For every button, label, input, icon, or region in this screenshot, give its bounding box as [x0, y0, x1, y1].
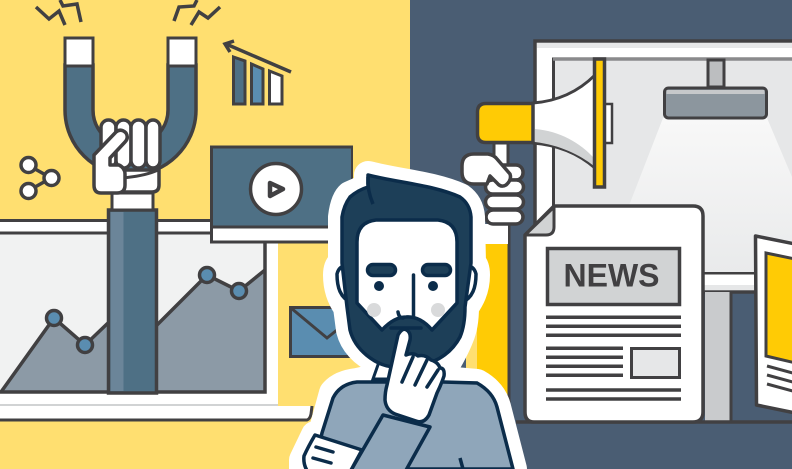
- panel: video player: [212, 147, 352, 242]
- floor line: [516, 420, 792, 424]
- line chart: [0, 268, 265, 392]
- body shirt: [314, 382, 513, 469]
- illustration: thinking bearded man: [303, 175, 513, 469]
- light beam: [600, 118, 792, 272]
- article photo: [632, 348, 680, 378]
- neck: [373, 362, 395, 379]
- dark blue background panel: [410, 0, 792, 469]
- yellow support column: [466, 222, 509, 422]
- ears: [337, 265, 352, 303]
- megaphone cone: [533, 75, 595, 168]
- left eyebrow: [368, 264, 396, 276]
- megaphone rim: [594, 59, 604, 187]
- lamp: [664, 60, 766, 118]
- white sticker outline: [303, 175, 513, 469]
- second hand finger gaps: [313, 447, 333, 463]
- panel: newspaper: [525, 206, 703, 422]
- headline box: [548, 248, 680, 304]
- grey support column: [705, 292, 731, 422]
- right eyebrow: [422, 264, 450, 276]
- icon: megaphone: [478, 59, 612, 187]
- yellow background panel: [0, 0, 410, 469]
- beard and hair: [342, 175, 471, 367]
- icon: envelope: [290, 308, 352, 356]
- megaphone grip: [478, 104, 533, 142]
- nose: [398, 275, 414, 318]
- article lines: [546, 317, 681, 399]
- cuff: [112, 193, 153, 210]
- fist palm: [118, 170, 159, 192]
- page fold: [525, 207, 554, 235]
- icon: share nodes: [21, 158, 59, 198]
- right cheek: [431, 303, 445, 317]
- thumb: [94, 130, 127, 193]
- panel: second newspaper: [756, 236, 792, 414]
- icon: play button: [250, 164, 302, 214]
- mouth: [391, 326, 421, 330]
- second hand: [304, 435, 362, 469]
- icon: magnetic sparks: [36, 0, 220, 25]
- megaphone stem: [494, 143, 508, 168]
- icon: magnet held by hand: [65, 38, 196, 393]
- left cheek: [367, 303, 381, 317]
- forearm sleeve: [350, 415, 430, 469]
- panel: right billboard frame: [535, 41, 792, 292]
- headline: NEWS: [564, 258, 660, 294]
- hair lock: [368, 177, 373, 204]
- face: [357, 220, 457, 330]
- monitor base: [0, 406, 312, 419]
- panel: left monitor with line chart: [0, 220, 312, 420]
- finger gaps: [402, 357, 438, 387]
- right eye: [428, 281, 438, 291]
- magnet: [65, 65, 196, 175]
- sleeve: [108, 210, 156, 393]
- icon: hand holding megaphone: [462, 154, 524, 244]
- hand with finger on lips: [385, 329, 444, 422]
- fingers: [101, 120, 116, 168]
- icon: declining bar chart with arrow: [225, 41, 291, 104]
- left eye: [374, 281, 384, 291]
- shirt crease: [460, 458, 463, 469]
